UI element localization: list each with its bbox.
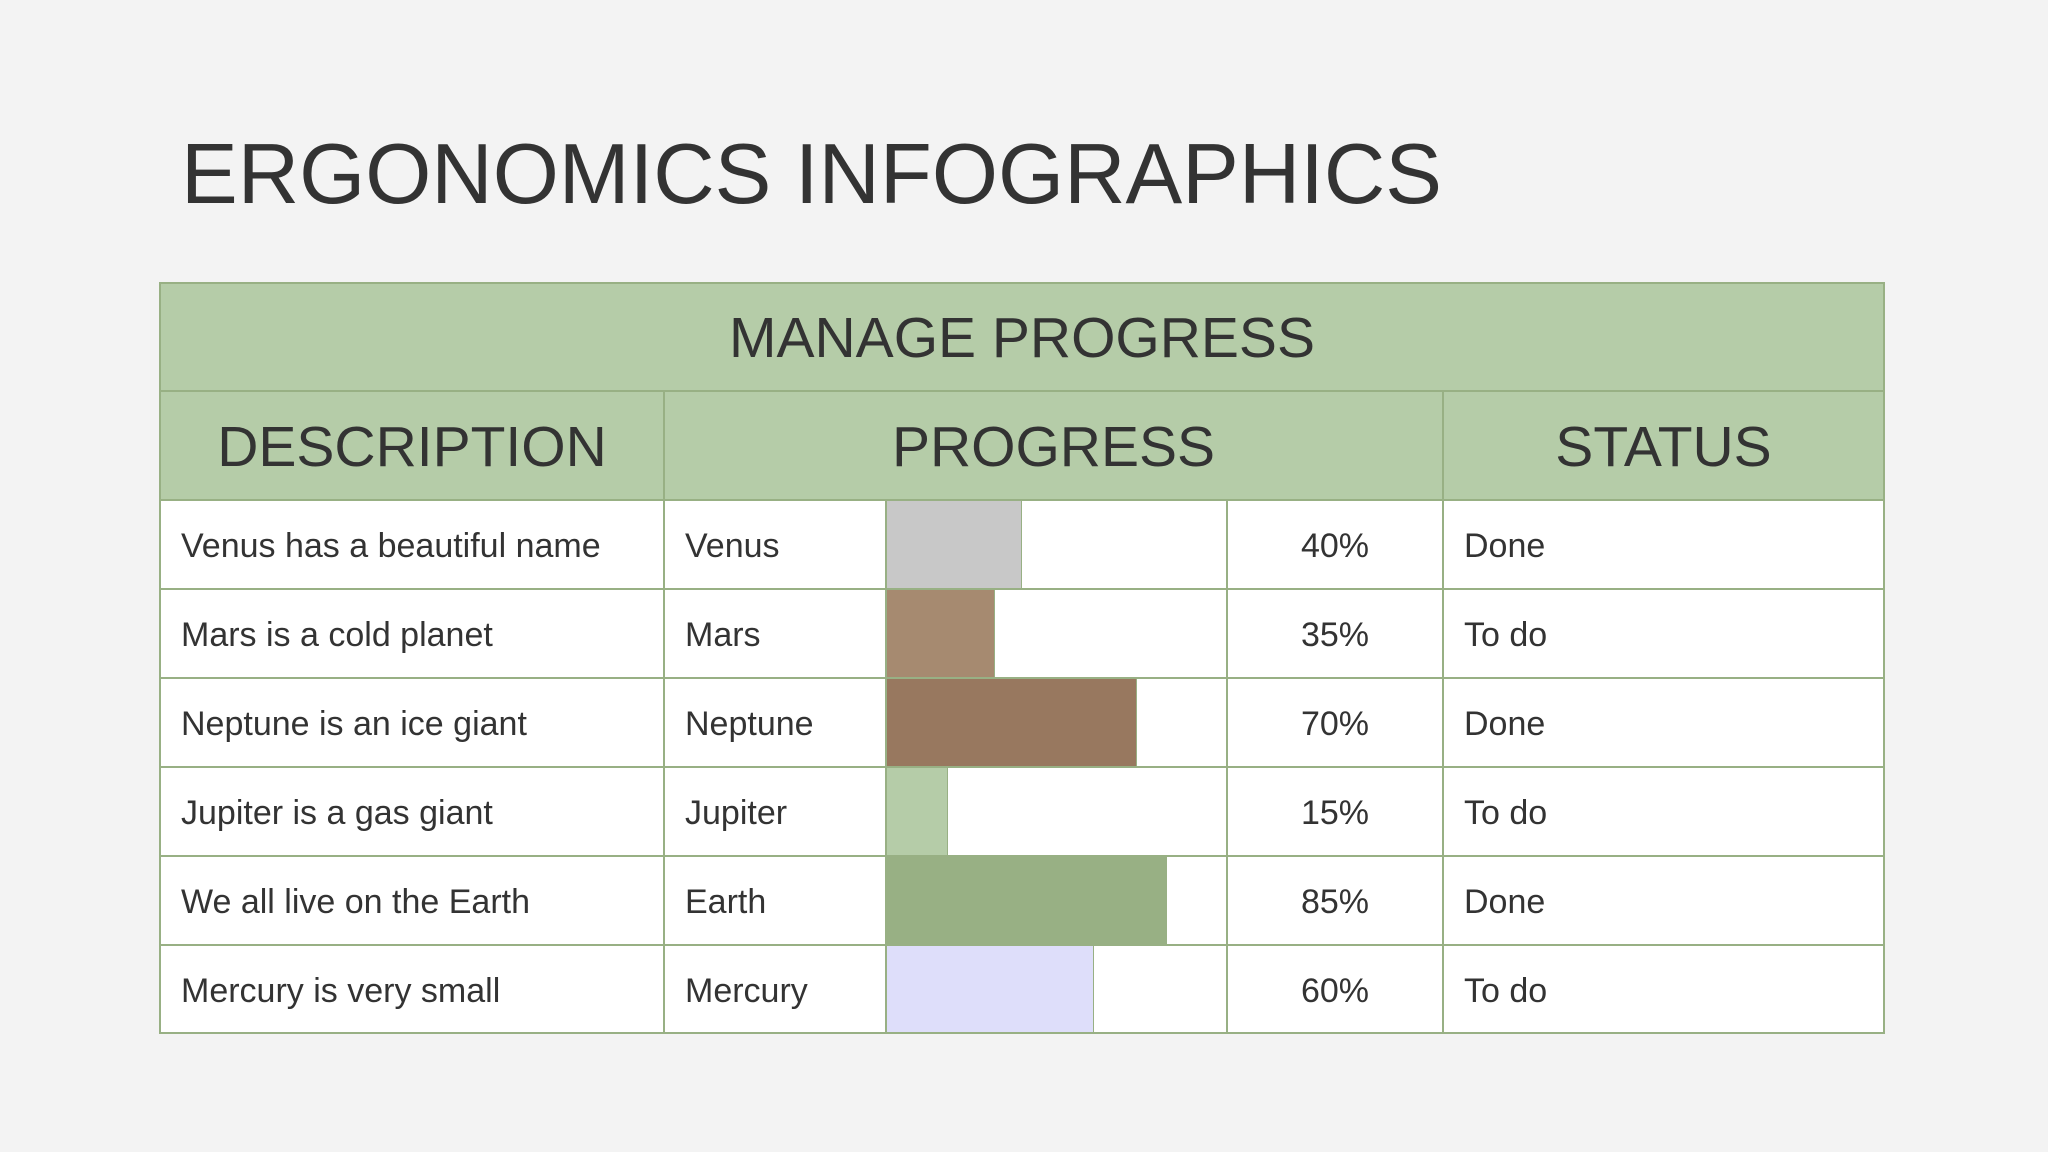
rows: 35% <box>1301 616 1369 654</box>
header: description: DESCRIPTION <box>217 414 607 478</box>
rows: To do <box>1464 616 1547 654</box>
rows: To do <box>1464 972 1547 1010</box>
header: description <box>159 390 665 501</box>
rows <box>159 501 1885 1034</box>
rows: 60% <box>1301 972 1369 1010</box>
rows: We all live on the Earth <box>181 883 530 921</box>
rows: Mercury <box>685 972 808 1010</box>
header: status: STATUS <box>1555 414 1772 478</box>
rows: 85% <box>1301 883 1369 921</box>
rows: Mars is a cold planet <box>181 616 493 654</box>
rows: Done <box>1464 705 1545 743</box>
title: ERGONOMICS INFOGRAPHICS <box>181 127 1442 222</box>
rows: Earth <box>685 883 766 921</box>
header: progress: PROGRESS <box>892 414 1215 478</box>
rows: To do <box>1464 794 1547 832</box>
rows: Mercury is very small <box>181 972 500 1010</box>
rows: Done <box>1464 883 1545 921</box>
rows: 15% <box>1301 794 1369 832</box>
rows: Venus has a beautiful name <box>181 527 601 565</box>
header: progress <box>663 390 1444 501</box>
rows: Jupiter <box>685 794 787 832</box>
rows: Venus <box>685 527 780 565</box>
header: manage progress <box>159 282 1885 392</box>
rows: 40% <box>1301 527 1369 565</box>
rows: Mars <box>685 616 761 654</box>
rows: Done <box>1464 527 1545 565</box>
rows: Neptune is an ice giant <box>181 705 527 743</box>
rows: Neptune <box>685 705 814 743</box>
header: manage progress: MANAGE PROGRESS <box>729 306 1315 370</box>
rows: 70% <box>1301 705 1369 743</box>
table: manage progress <box>159 282 1885 1034</box>
rows: Jupiter is a gas giant <box>181 794 493 832</box>
header: status <box>1442 390 1885 501</box>
